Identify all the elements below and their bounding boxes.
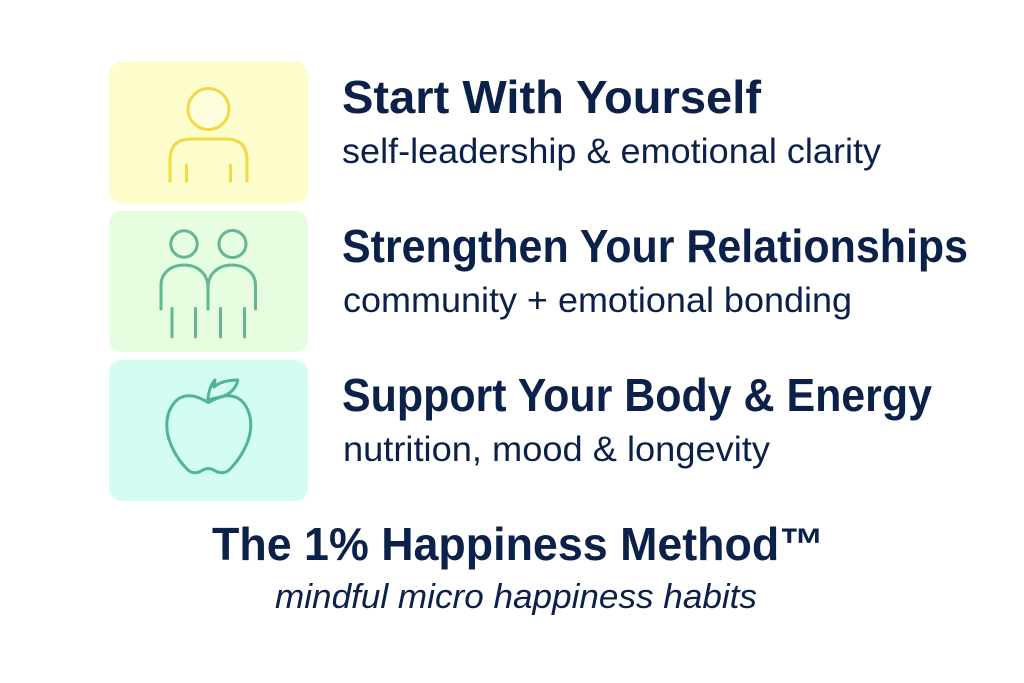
text: nutrition subtitle: nutrition, mood & longevity	[343, 430, 771, 469]
text: self-leadership subtitle: self-leadership & emotional clarity	[342, 132, 882, 171]
panel: body and energy icon tile	[109, 360, 308, 501]
title: the 1% happiness method: The 1% Happiness Method™	[212, 518, 824, 570]
heading: support your body and energy: Support Your Body & Energy	[342, 369, 932, 421]
icon: single person	[170, 88, 247, 181]
text: tagline: mindful micro happiness habits	[275, 578, 757, 616]
icon: apple	[167, 380, 251, 473]
panel: relationships icon tile	[109, 211, 308, 352]
text: community subtitle: community + emotional bonding	[343, 281, 852, 320]
panel: start with yourself icon tile	[109, 62, 308, 204]
heading: start with yourself: Start With Yourself	[342, 71, 762, 123]
heading: strengthen your relationships: Strengthen Your Relationships	[342, 220, 968, 272]
icon: two people	[161, 230, 256, 337]
